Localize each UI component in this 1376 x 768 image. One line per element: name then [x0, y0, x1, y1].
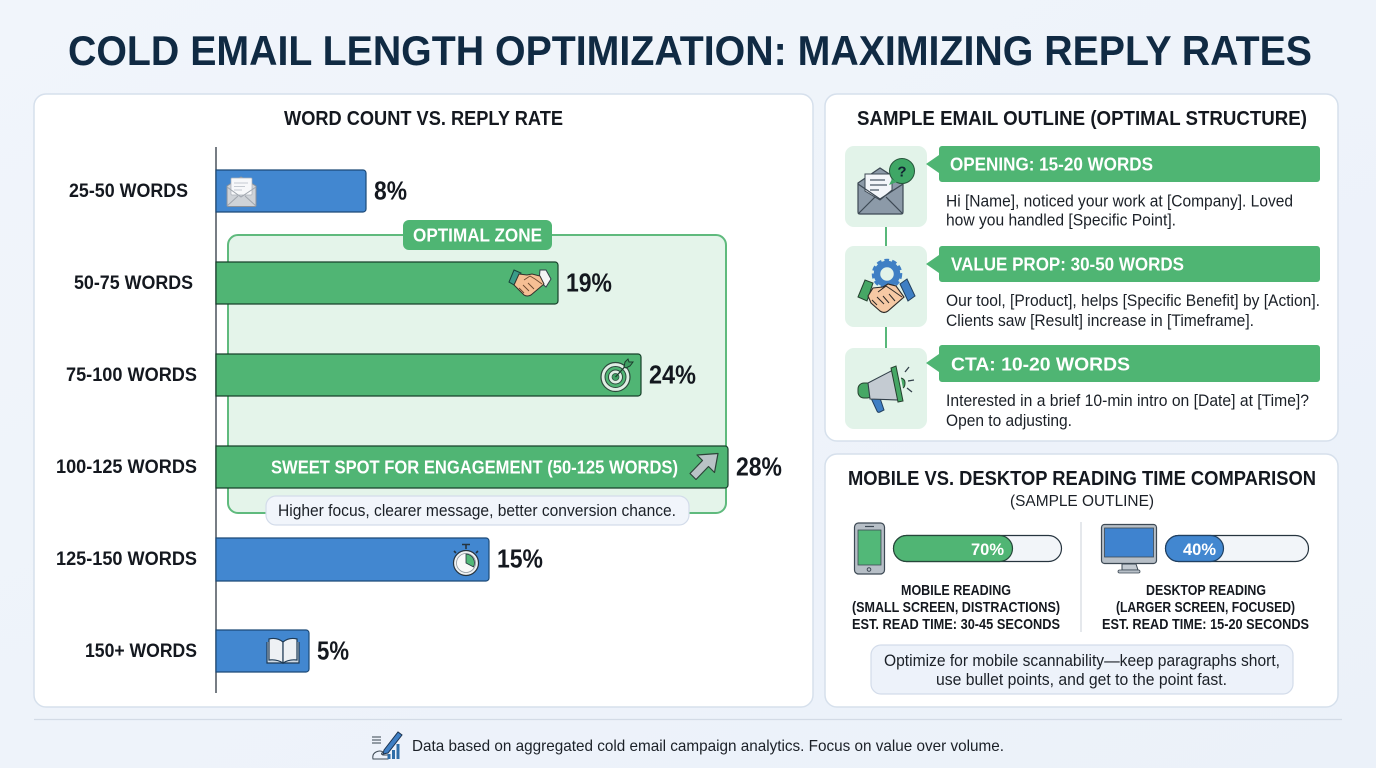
step header: VALUE PROP: 30-50 WORDS [951, 254, 1184, 274]
callout: sweet spot [266, 496, 689, 525]
optimal zone label [403, 220, 552, 250]
bar: 100-125 words: 28% [736, 452, 782, 482]
bar: 125-150 words: 15% [497, 544, 543, 574]
step body: Open to adjusting. [946, 411, 1072, 430]
desktop text: EST. READ TIME: 15-20 SECONDS [1102, 616, 1309, 633]
mobile text: (SMALL SCREEN, DISTRACTIONS) [852, 599, 1060, 616]
optimal zone label: OPTIMAL ZONE [413, 224, 542, 246]
bar: 50-75 words: 19% [566, 268, 612, 298]
bar: 25-50 words [69, 170, 407, 212]
bar: 125-150 words: 125-150 WORDS [56, 549, 197, 570]
desktop text: (LARGER SCREEN, FOCUSED) [1116, 599, 1295, 616]
desktop text: DESKTOP READING [1146, 582, 1266, 599]
mobile column [852, 523, 1062, 633]
desktop bar [1166, 536, 1308, 562]
footer note: Data based on aggregated cold email campaign analytics. Focus on value over volume. [412, 738, 1004, 755]
axis [215, 147, 217, 693]
step body: Clients saw [Result] increase in [Timeframe]. [946, 311, 1254, 330]
icon: up arrow [690, 454, 718, 480]
desktop text [1102, 582, 1309, 633]
step header [926, 345, 1320, 382]
bar: 150+ words: 150+ WORDS [85, 641, 197, 662]
step: opening [845, 146, 1320, 230]
panel: word count vs reply rate [34, 94, 813, 707]
icon: open envelope [227, 177, 256, 206]
bar: 150+ words: 5% [317, 636, 349, 666]
bar: 50-75 words [74, 262, 612, 304]
step body: Interested in a brief 10-min intro on [Date] at [Time]? [946, 391, 1309, 410]
step header: CTA: 10-20 WORDS [951, 354, 1130, 374]
bar: 100-125 words [56, 446, 782, 488]
step body [946, 291, 1320, 330]
step: cta [845, 345, 1320, 430]
panel: mobile vs desktop [825, 454, 1338, 707]
bar: 75-100 words [66, 354, 696, 396]
step body [946, 391, 1309, 430]
icon: pen and chart [372, 732, 402, 759]
callout: mobile scannability: use bullet points, and get to the point fast. [936, 671, 1227, 689]
icon: target [601, 359, 633, 392]
step body: Hi [Name], noticed your work at [Company]. Loved [946, 192, 1293, 210]
step header: OPENING: 15-20 WORDS [950, 154, 1153, 174]
footer [372, 732, 1004, 759]
step: value prop [845, 246, 1320, 330]
desktop bar: 40% [1183, 541, 1216, 559]
mobile bar: 70% [971, 541, 1004, 559]
bar: 150+ words [85, 630, 349, 672]
mobile text: MOBILE READING [901, 582, 1011, 599]
icon: envelope with question bubble [858, 158, 914, 214]
icon: gear and handshake [858, 261, 915, 312]
mobile text: EST. READ TIME: 30-45 SECONDS [852, 616, 1060, 633]
optimal zone background [228, 235, 726, 513]
bar: 125-150 words [56, 538, 543, 581]
step body: Our tool, [Product], helps [Specific Benefit] by [Action]. [946, 291, 1320, 310]
bar: 75-100 words: 75-100 WORDS [66, 365, 197, 386]
bar: 100-125 words: 100-125 WORDS [56, 457, 197, 478]
bar caption: SWEET SPOT FOR ENGAGEMENT (50-125 WORDS) [271, 458, 678, 478]
icon: stopwatch [454, 544, 478, 576]
comparison heading: (SAMPLE OUTLINE) [1010, 493, 1154, 510]
step body [946, 192, 1293, 230]
callout: sweet spot: Higher focus, clearer message, better conversion chance. [278, 502, 676, 520]
outline heading: SAMPLE EMAIL OUTLINE (OPTIMAL STRUCTURE) [857, 107, 1307, 130]
bar: 75-100 words: 24% [649, 360, 696, 390]
step header [926, 246, 1320, 282]
chart heading: WORD COUNT VS. REPLY RATE [284, 107, 563, 130]
callout: mobile scannability [871, 645, 1293, 694]
callout: mobile scannability: Optimize for mobile scannability—keep paragraphs short, [884, 652, 1280, 670]
icon: envelope with question bubble: ? [897, 164, 907, 180]
icon: megaphone [858, 366, 914, 412]
icon: phone [854, 523, 884, 574]
bar: 25-50 words: 25-50 WORDS [69, 181, 188, 202]
icon: monitor [1102, 524, 1156, 573]
mobile bar [894, 536, 1062, 562]
step header [926, 146, 1320, 182]
mobile text [852, 582, 1060, 633]
panel: sample email outline [825, 94, 1338, 441]
desktop column [1102, 524, 1309, 633]
icon: handshake [509, 270, 551, 296]
comparison heading [848, 467, 1316, 510]
bar: 50-75 words: 50-75 WORDS [74, 273, 193, 294]
bar: 25-50 words: 8% [374, 176, 407, 206]
step body: how you handled [Specific Point]. [946, 210, 1176, 230]
title: COLD EMAIL LENGTH OPTIMIZATION: MAXIMIZING REPLY RATES [68, 27, 1312, 74]
icon: open book [267, 638, 299, 663]
comparison heading: MOBILE VS. DESKTOP READING TIME COMPARISON [848, 467, 1316, 490]
